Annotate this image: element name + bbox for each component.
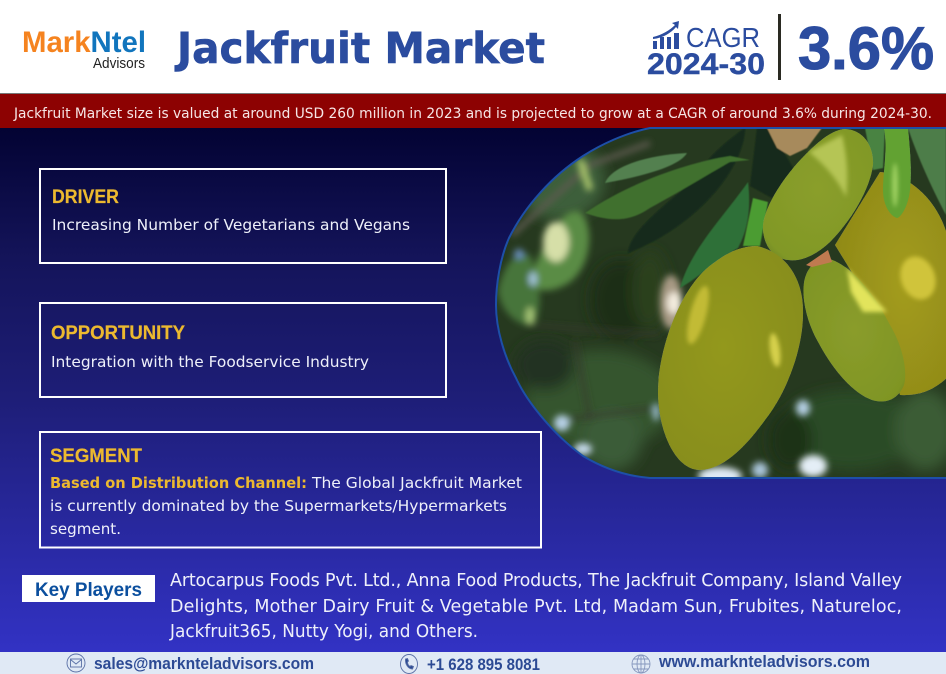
bokeh highlights [554, 415, 570, 431]
website: www.marknteladvisors.com [658, 652, 870, 671]
title: Jackfruit Market [174, 24, 545, 74]
small green fruit [883, 128, 911, 218]
opportunity text: Integration with the Foodservice Industry [51, 353, 369, 371]
email address: sales@marknteladvisors.com [94, 654, 314, 673]
opportunity heading: OPPORTUNITY [51, 323, 185, 344]
key players text: Artocarpus Foods Pvt. Ltd., Anna Food Products, The Jackfruit Company, Island Valley [170, 571, 902, 591]
key players text: Delights, Mother Dairy Fruit & Vegetable Pvt. Ltd, Madam Sun, Frubites, Natureloc, [170, 597, 902, 617]
logo: MarkNtel Advisors: Advisors [93, 55, 145, 72]
left leaf [498, 254, 540, 326]
main gradient panel [0, 128, 946, 652]
icon: phone [400, 654, 418, 674]
key players text [169, 571, 902, 642]
icon: globe [632, 655, 650, 673]
stem [743, 198, 768, 246]
photo: jackfruits on tree [490, 128, 946, 485]
panel: driver [40, 169, 446, 263]
key players text: Jackfruit365, Nutty Yogi, and Others. [169, 622, 478, 642]
leaf: upper pale [605, 153, 687, 183]
stem scar [806, 250, 832, 267]
back fruit [835, 172, 946, 395]
branches [512, 143, 650, 235]
driver heading: DRIVER [52, 187, 119, 208]
CAGR years: 2024-30 [647, 48, 765, 81]
footer bar [0, 652, 946, 674]
top fruit [763, 129, 873, 260]
leaf: mid green [680, 182, 749, 288]
panel: opportunity [40, 303, 446, 397]
segment text: is currently dominated by the Supermarkets/Hypermarkets [50, 497, 507, 515]
dry leaf [767, 128, 822, 156]
CAGR block [647, 21, 765, 81]
leaf: main green [585, 156, 750, 219]
key players label [22, 575, 155, 602]
CAGR label: CAGR [686, 22, 760, 53]
leaf: very dark [750, 128, 793, 198]
driver text: Increasing Number of Vegetarians and Vegans [52, 216, 410, 234]
panel: segment [40, 432, 541, 548]
segment text [50, 474, 522, 538]
right middle fruit [803, 258, 905, 401]
key players label: Key Players [35, 580, 142, 601]
big front fruit [658, 246, 803, 470]
icon: growth chart [653, 21, 679, 49]
CAGR value: 3.6% [798, 15, 934, 82]
segment text: Based on Distribution Channel: [50, 474, 307, 492]
fruit group [658, 128, 946, 470]
leaf: dark [628, 128, 745, 253]
right leaves [908, 128, 946, 215]
blurred background foliage [515, 140, 946, 470]
phone number: +1 628 895 8081 [427, 655, 540, 674]
logo: MarkNtel Advisors: MarkNtel [22, 26, 146, 59]
icon: email [67, 654, 85, 672]
segment text: The Global Jackfruit Market [311, 474, 522, 492]
pale bud [660, 275, 682, 329]
summary banner [0, 93, 946, 128]
segment heading: SEGMENT [50, 446, 142, 467]
segment text: segment. [50, 520, 121, 538]
